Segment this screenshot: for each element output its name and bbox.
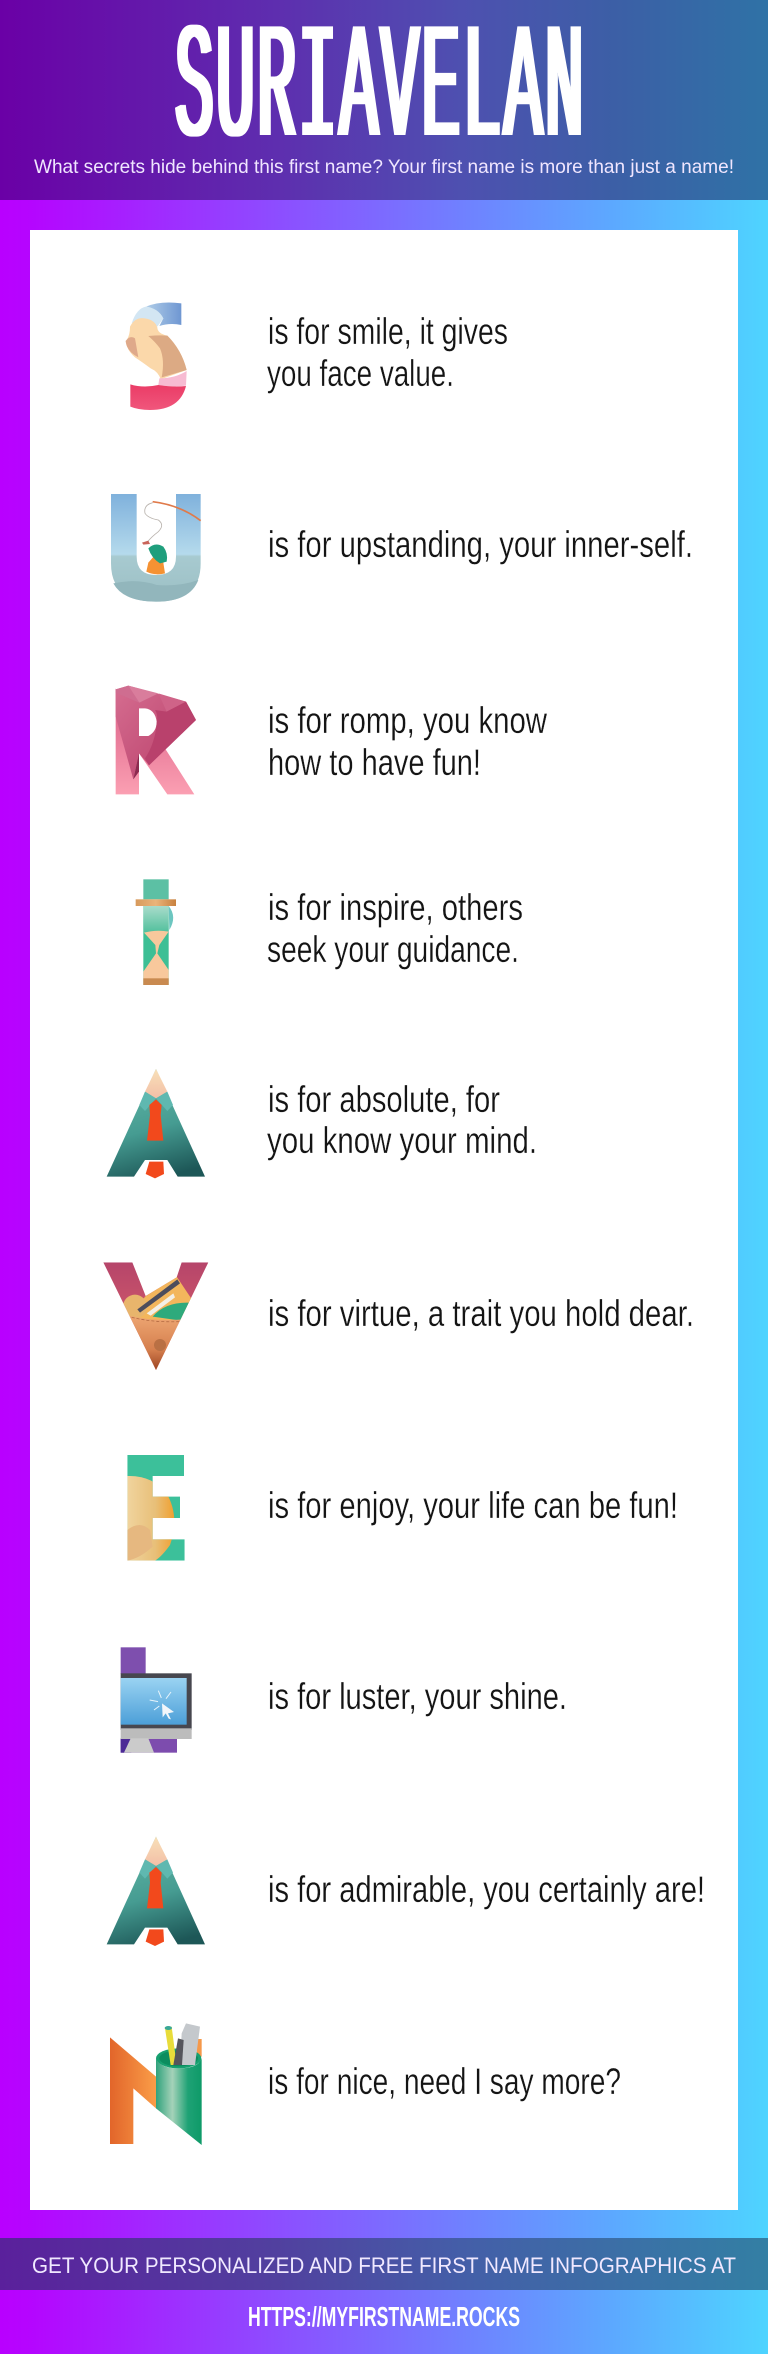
- footer call to action: GET YOUR PERSONALIZED AND FREE FIRST NAME INFOGRAPHICS AT: [32, 2253, 736, 2278]
- subtitle: What secrets hide behind this first name? Your first name is more than just a name!: [34, 156, 734, 178]
- text: I: seek your guidance.: [267, 929, 519, 970]
- icon: letter A with necktie: [107, 1837, 205, 1946]
- icon: letter A with necktie: [107, 1069, 205, 1178]
- icon: letter V with wallet: [100, 1260, 210, 1373]
- text: R: is for romp, you know: [268, 700, 547, 741]
- text: A: [267, 1079, 537, 1161]
- text: R: [268, 700, 547, 783]
- icon: letter R with gem: [116, 686, 196, 794]
- icon: letter S with hand: [126, 303, 187, 410]
- row: E: [127, 1453, 678, 1563]
- icon: letter E with cookie: [127, 1453, 187, 1563]
- icon: letter U with fishing scene: [111, 494, 201, 602]
- row: R: [116, 686, 547, 794]
- text: S: you face value.: [267, 353, 454, 394]
- text: A: is for absolute, for: [268, 1079, 500, 1120]
- text: A: you know your mind.: [267, 1120, 537, 1161]
- row: V: [100, 1260, 694, 1373]
- header band: [0, 0, 768, 200]
- row: A (second): [107, 1837, 705, 1946]
- white content panel: [30, 230, 738, 2210]
- row: L: [121, 1647, 567, 1753]
- title: SURIAVELAN: [175, 0, 584, 185]
- icon: letter I hourglass: [136, 879, 176, 985]
- text: L: is for luster, your shine.: [268, 1676, 567, 1717]
- icon: letter L with computer monitor: [121, 1647, 192, 1753]
- text: R: how to have fun!: [268, 742, 481, 783]
- text: I: is for inspire, others: [268, 887, 523, 928]
- text: S: is for smile, it gives: [268, 311, 508, 352]
- row: A: [107, 1069, 537, 1178]
- footer band: [0, 2238, 768, 2290]
- row: U: [111, 494, 693, 602]
- footer url: HTTPS://MYFIRSTNAME.ROCKS: [248, 2301, 520, 2332]
- text: I: [267, 887, 523, 970]
- icon: letter N with pen holder: [110, 2023, 202, 2145]
- row: N: [110, 2023, 621, 2145]
- row: I: [136, 879, 523, 985]
- text: S: [267, 311, 508, 394]
- row: S: [126, 303, 508, 410]
- text: N: is for nice, need I say more?: [268, 2061, 621, 2102]
